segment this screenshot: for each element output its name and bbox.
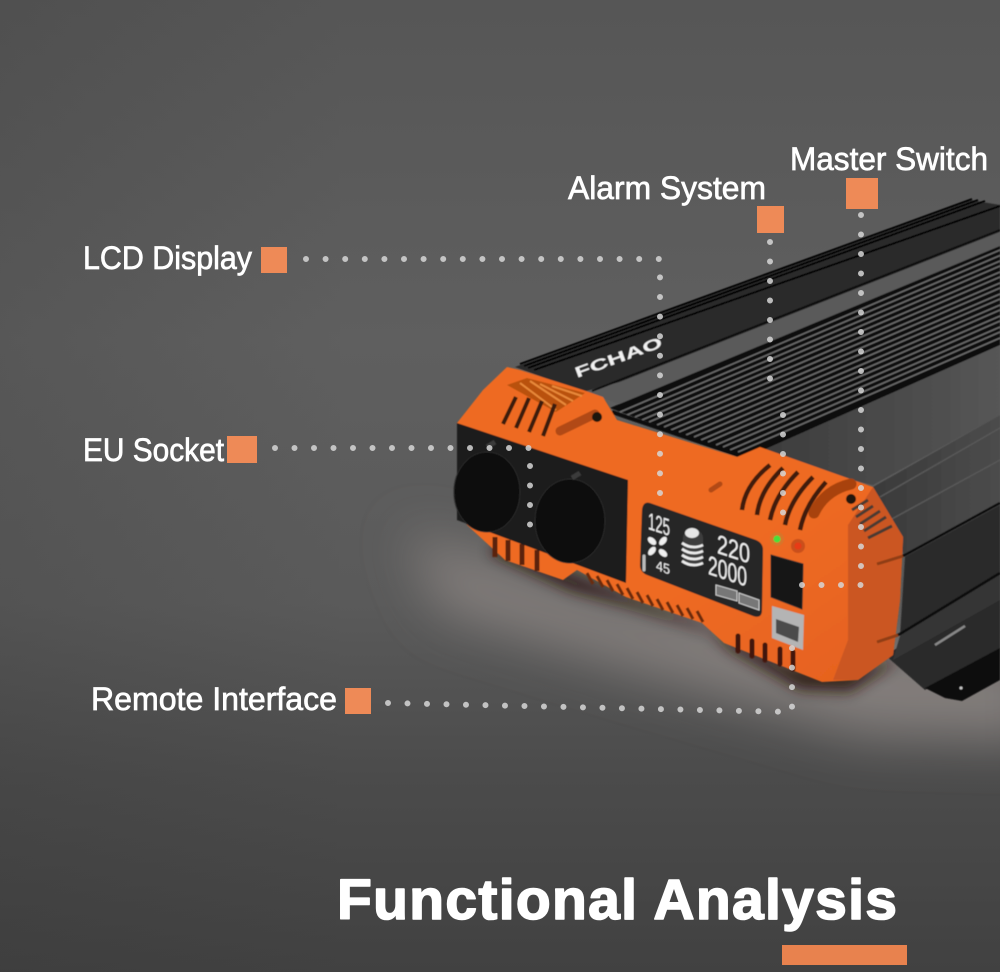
LCD display [640, 503, 763, 617]
LCD readings: 220 [717, 529, 750, 570]
darker right facet [833, 487, 903, 680]
callout: EU Socket: EU Socket [83, 432, 224, 468]
marker [261, 247, 287, 273]
green indicator LED [770, 532, 784, 546]
leader dots [800, 215, 861, 585]
inverter product illustration [454, 199, 1000, 701]
callout: Master Switch [790, 141, 988, 585]
title: Functional Analysis [337, 868, 897, 932]
heat sink fins [610, 246, 1000, 458]
LCD fan icon [646, 535, 669, 559]
cast shadow under inverter [488, 545, 900, 692]
EU socket panel [454, 423, 628, 583]
callout: Remote Interface [91, 633, 792, 717]
title underline bar [782, 945, 907, 965]
callout: Remote Interface: Remote Interface [91, 681, 337, 717]
LCD thermometer icon [642, 556, 646, 570]
callout: LCD Display [83, 240, 660, 495]
smooth top panel [747, 343, 1000, 485]
callout: Alarm System: Alarm System [568, 170, 766, 206]
leader dots [770, 242, 783, 514]
inverter side wall [873, 415, 1000, 660]
leader dots [275, 448, 530, 527]
callout: Master Switch: Master Switch [790, 141, 988, 177]
LCD battery icon [682, 528, 703, 565]
callout: EU Socket [83, 432, 530, 527]
leader dots [306, 259, 660, 495]
master switch [771, 555, 803, 609]
LCD readings: 2000 [708, 550, 747, 593]
marker [227, 436, 257, 463]
orange front housing [457, 367, 903, 682]
LCD status boxes [716, 585, 759, 610]
marker [846, 178, 878, 209]
marker [757, 206, 784, 233]
LCD readings: 45 [656, 558, 670, 578]
brand name: FCHAO [573, 334, 665, 382]
RJ45 remote port [772, 606, 804, 650]
callout: LCD Display: LCD Display [83, 240, 252, 276]
mounting bracket [885, 590, 1000, 701]
upper brand band [515, 199, 1000, 404]
leader dots [388, 633, 792, 712]
callout: Alarm System [568, 170, 784, 514]
marker [345, 688, 371, 714]
LCD readings: 125 [648, 509, 670, 542]
red indicator LED [791, 539, 805, 553]
LCD readings [648, 509, 750, 593]
